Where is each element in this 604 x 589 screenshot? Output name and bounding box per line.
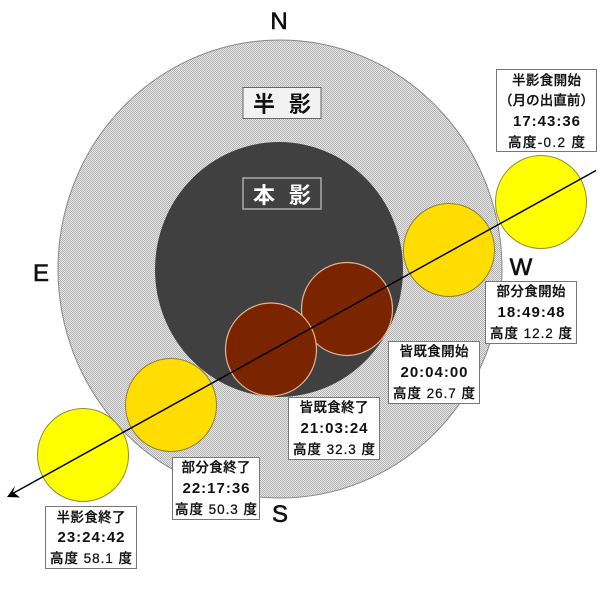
callout: totality start: [388, 342, 480, 404]
moon: penumbral eclipse start: [496, 156, 586, 248]
callout: partial eclipse end: [172, 458, 260, 520]
callout: totality end: 21:03:24: [300, 420, 368, 437]
callout: totality start: 高度 26.7 度: [393, 385, 476, 401]
callout: totality end: 高度 32.3 度: [293, 441, 376, 457]
callout: penumbral eclipse start: （月の出直前）: [499, 92, 594, 108]
moon: totality start: [302, 262, 392, 356]
callout: penumbral eclipse start: 高度-0.2 度: [508, 134, 586, 150]
callout: partial eclipse start: 高度 12.2 度: [490, 325, 572, 341]
umbra circle: [155, 142, 403, 397]
callout: penumbral eclipse end: 高度 58.1 度: [50, 550, 132, 566]
callout: penumbral eclipse start: 17:43:36: [513, 113, 580, 130]
callout: penumbral eclipse end: 23:24:42: [58, 529, 124, 546]
callout: partial eclipse start: 18:49:48: [498, 304, 564, 321]
callout: partial eclipse start: 部分食開始: [496, 284, 566, 299]
callout: penumbral eclipse end: [46, 506, 136, 568]
compass: west: W: [510, 254, 533, 281]
callout: partial eclipse end: 部分食終了: [182, 460, 250, 475]
label: umbra: 本影: [253, 183, 325, 208]
moon: penumbral eclipse end: [38, 408, 128, 502]
label: penumbra: 半影: [253, 92, 325, 117]
callout: penumbral eclipse start: [496, 70, 596, 152]
callout: totality start: 20:04:00: [400, 364, 468, 381]
callout: penumbral eclipse end: 半影食終了: [56, 510, 126, 525]
compass: north: N: [270, 8, 288, 35]
callout: totality end: 皆既食終了: [300, 400, 368, 415]
compass: east: E: [33, 260, 49, 287]
callout: penumbral eclipse start: 半影食開始: [512, 73, 582, 88]
callout: partial eclipse end: 22:17:36: [182, 480, 250, 497]
callout: totality end: [288, 398, 380, 460]
callout: partial eclipse start: [486, 282, 576, 344]
callout: partial eclipse end: 高度 50.3 度: [175, 501, 258, 517]
callout: totality start: 皆既食開始: [400, 344, 469, 359]
compass: south: S: [272, 501, 288, 528]
arrow: moon path: [7, 170, 596, 498]
moon: totality end: [226, 303, 316, 396]
penumbra circle: [58, 40, 502, 498]
moon: partial eclipse start: [404, 204, 494, 296]
moon: partial eclipse end: [126, 358, 216, 452]
